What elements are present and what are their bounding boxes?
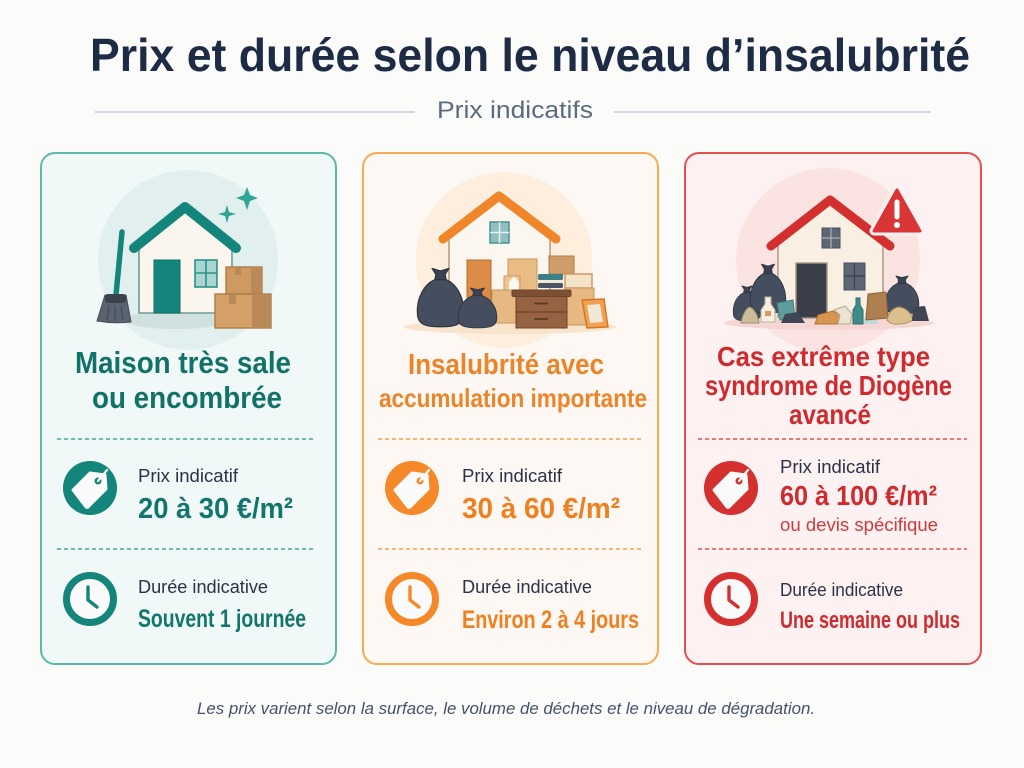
heading: syndrome de Diogène [705, 370, 952, 401]
duration block: Durée indicative [462, 577, 592, 597]
icon: price tag [704, 461, 758, 515]
subtitle: Prix indicatifs [437, 97, 593, 124]
footnote: Les prix varient selon la surface, le volume de déchets et le niveau de dégradation. [197, 699, 815, 718]
heading: accumulation importante [379, 383, 647, 413]
panel: maison très sale [41, 153, 336, 664]
heading: ou encombrée [92, 380, 282, 415]
icon: clock [66, 576, 114, 622]
illustration: clean house [97, 170, 278, 350]
icon: price tag [63, 461, 117, 515]
price block [138, 466, 293, 525]
heading: avancé [789, 399, 871, 430]
duration block [138, 577, 306, 633]
price block: Prix indicatif [780, 457, 881, 477]
illustration: extreme house [724, 168, 934, 352]
heading: Cas extrême type [717, 341, 930, 372]
heading [75, 345, 291, 415]
price block: ou devis spécifique [780, 515, 938, 535]
icon: price tag [385, 461, 439, 515]
heading [379, 349, 647, 413]
icon: clock [708, 576, 754, 622]
panel: cas extrême [685, 153, 981, 664]
duration block [462, 577, 639, 634]
icon: clock [388, 576, 436, 622]
duration block: Une semaine ou plus [780, 607, 960, 634]
price block [780, 457, 938, 535]
heading: Maison très sale [75, 345, 291, 380]
price block: Prix indicatif [138, 466, 239, 486]
price block: 30 à 60 €/m² [462, 493, 620, 525]
duration block: Souvent 1 journée [138, 605, 306, 633]
panel: insalubrité avec accumulation [363, 153, 658, 664]
price block: Prix indicatif [462, 466, 563, 486]
duration block: Durée indicative [780, 580, 903, 600]
price block: 60 à 100 €/m² [780, 480, 937, 511]
heading [705, 341, 952, 430]
illustration: cluttered house [404, 172, 616, 348]
duration block: Environ 2 à 4 jours [462, 606, 639, 634]
heading: Insalubrité avec [408, 349, 604, 381]
duration block: Durée indicative [138, 577, 268, 597]
title: Prix et durée selon le niveau d’insalubrité [90, 29, 970, 81]
price block [462, 466, 620, 525]
price block: 20 à 30 €/m² [138, 493, 293, 525]
duration block [780, 580, 960, 634]
